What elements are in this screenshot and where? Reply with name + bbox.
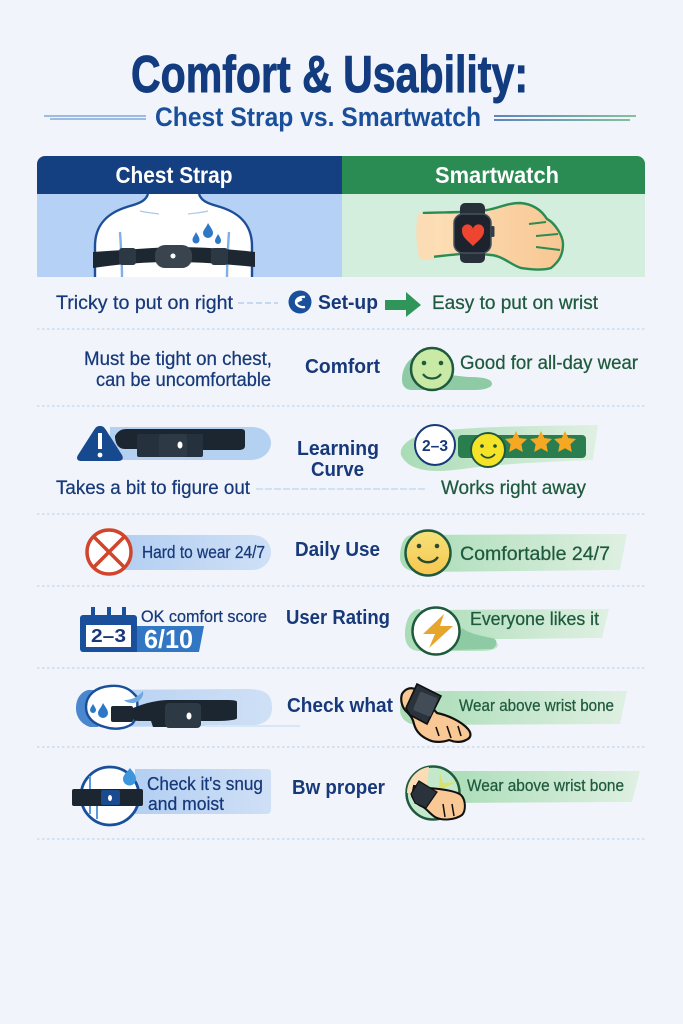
be proper label: Bw proper [292,776,385,799]
user rating smartwatch text: Everyone likes it [470,608,599,629]
icon: calendar score [80,607,204,654]
row: daily use [87,530,627,576]
icon: snug strap [72,767,271,825]
row: learning curve [56,425,598,499]
icon: hand with watch [400,684,627,742]
row: set-up [56,290,599,317]
chest strap header [37,156,342,194]
row divider [37,329,645,839]
icon: snug strap: and moist [148,793,224,814]
subtitle [44,102,636,132]
chest strap illustration [37,194,342,277]
panel: comparison header [37,156,645,277]
arrow: set-up [385,292,421,317]
icon: rating stars [401,425,598,471]
learning curve label: Curve [311,458,364,481]
comfort smartwatch text: Good for all-day wear [460,352,638,374]
comfort chest strap text [84,348,272,391]
comfort label: Comfort [305,355,380,378]
row: be proper [72,766,640,825]
smartwatch header: Smartwatch [435,162,559,188]
comfort chest strap text: can be uncomfortable [96,369,271,391]
icon: moist strap [76,686,300,729]
learning curve label [297,437,379,481]
icon: calendar score: 6/10 [144,624,193,654]
chest strap header: Chest Strap [116,162,232,188]
row: check what [76,684,627,742]
smartwatch header [342,156,645,194]
check what label: Check what [287,694,393,717]
icon: lightning bolt [405,608,609,654]
comfort chest strap text: Must be tight on chest, [84,348,272,370]
row: comfort [84,348,638,391]
icon: warning and strap [77,426,271,461]
icon: snug strap: Check it's snug [147,773,263,794]
learning curve label: Learning [297,437,379,460]
set-up label: Set-up [318,291,378,314]
daily use chest strap pill: Hard to wear 24/7 [142,542,265,562]
daily use smartwatch pill: Comfortable 24/7 [460,543,610,565]
set-up smartwatch text: Easy to put on wrist [432,292,599,314]
icon: fist with watch: Wear above wrist bone [467,777,624,795]
user rating label: User Rating [286,606,390,629]
learning curve smartwatch text: Works right away [441,477,586,499]
learning curve chest strap text: Takes a bit to figure out [56,477,251,499]
icon: calendar score: 2–3 [91,626,126,646]
daily use chest strap pill [87,530,271,574]
user rating chest strap text: OK comfort score [141,607,267,626]
smartwatch illustration [342,194,645,277]
icon: rating stars: 2–3 [422,438,448,455]
title: Comfort & Usability: [131,46,528,104]
set-up chest strap text: Tricky to put on right [56,292,234,314]
daily use label: Daily Use [295,538,380,561]
daily use smartwatch pill [400,530,627,576]
row: user rating [80,606,609,654]
subtitle: Chest Strap vs. Smartwatch [155,102,481,132]
icon: green smiley [402,348,492,390]
icon: hand with watch: Wear above wrist bone [459,697,614,715]
icon: fist with watch [406,766,640,820]
icon: set-up [288,290,312,314]
